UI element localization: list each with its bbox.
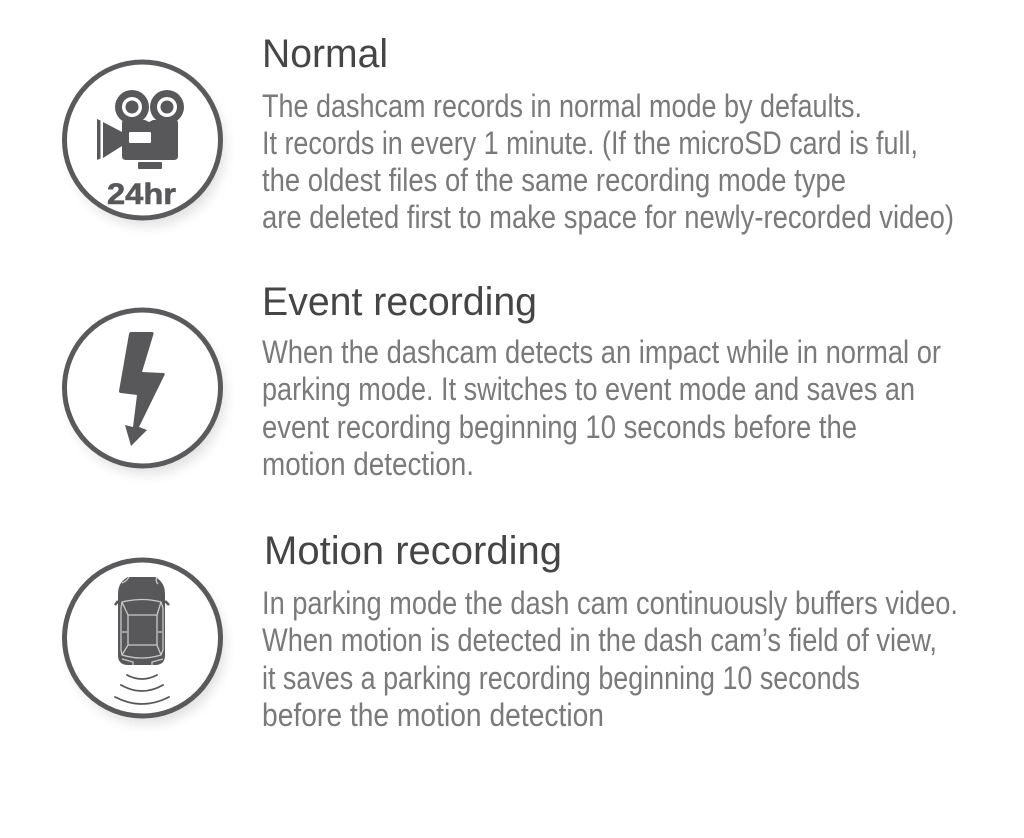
icon: car with motion waves (64, 560, 225, 724)
text block: event description: motion detection. (262, 446, 474, 482)
icon: lightning bolt (64, 310, 225, 474)
text block: normal description: The dashcam records in normal mode by defaults. (262, 88, 862, 124)
heading: Motion recording: Motion recording (264, 529, 562, 573)
heading: Event recording: Event recording (262, 280, 537, 324)
heading: Normal: Normal (262, 32, 388, 76)
text block: normal description: the oldest files of the same recording mode type (262, 162, 846, 198)
icon: video camera 24hr (64, 62, 225, 226)
text block: motion description (262, 585, 958, 733)
icon: video camera 24hr: 24hr (107, 178, 176, 211)
text block: normal description (262, 88, 954, 235)
text block: normal description: It records in every 1 minute. (If the microSD card is full, (262, 125, 918, 161)
text block: event description: event recording beginning 10 seconds before the (262, 409, 857, 445)
text block: motion description: before the motion detection (262, 697, 604, 733)
text block: event description (262, 334, 941, 482)
text block: event description: parking mode. It switches to event mode and saves an (262, 371, 915, 407)
text block: motion description: it saves a parking recording beginning 10 seconds (262, 660, 860, 696)
